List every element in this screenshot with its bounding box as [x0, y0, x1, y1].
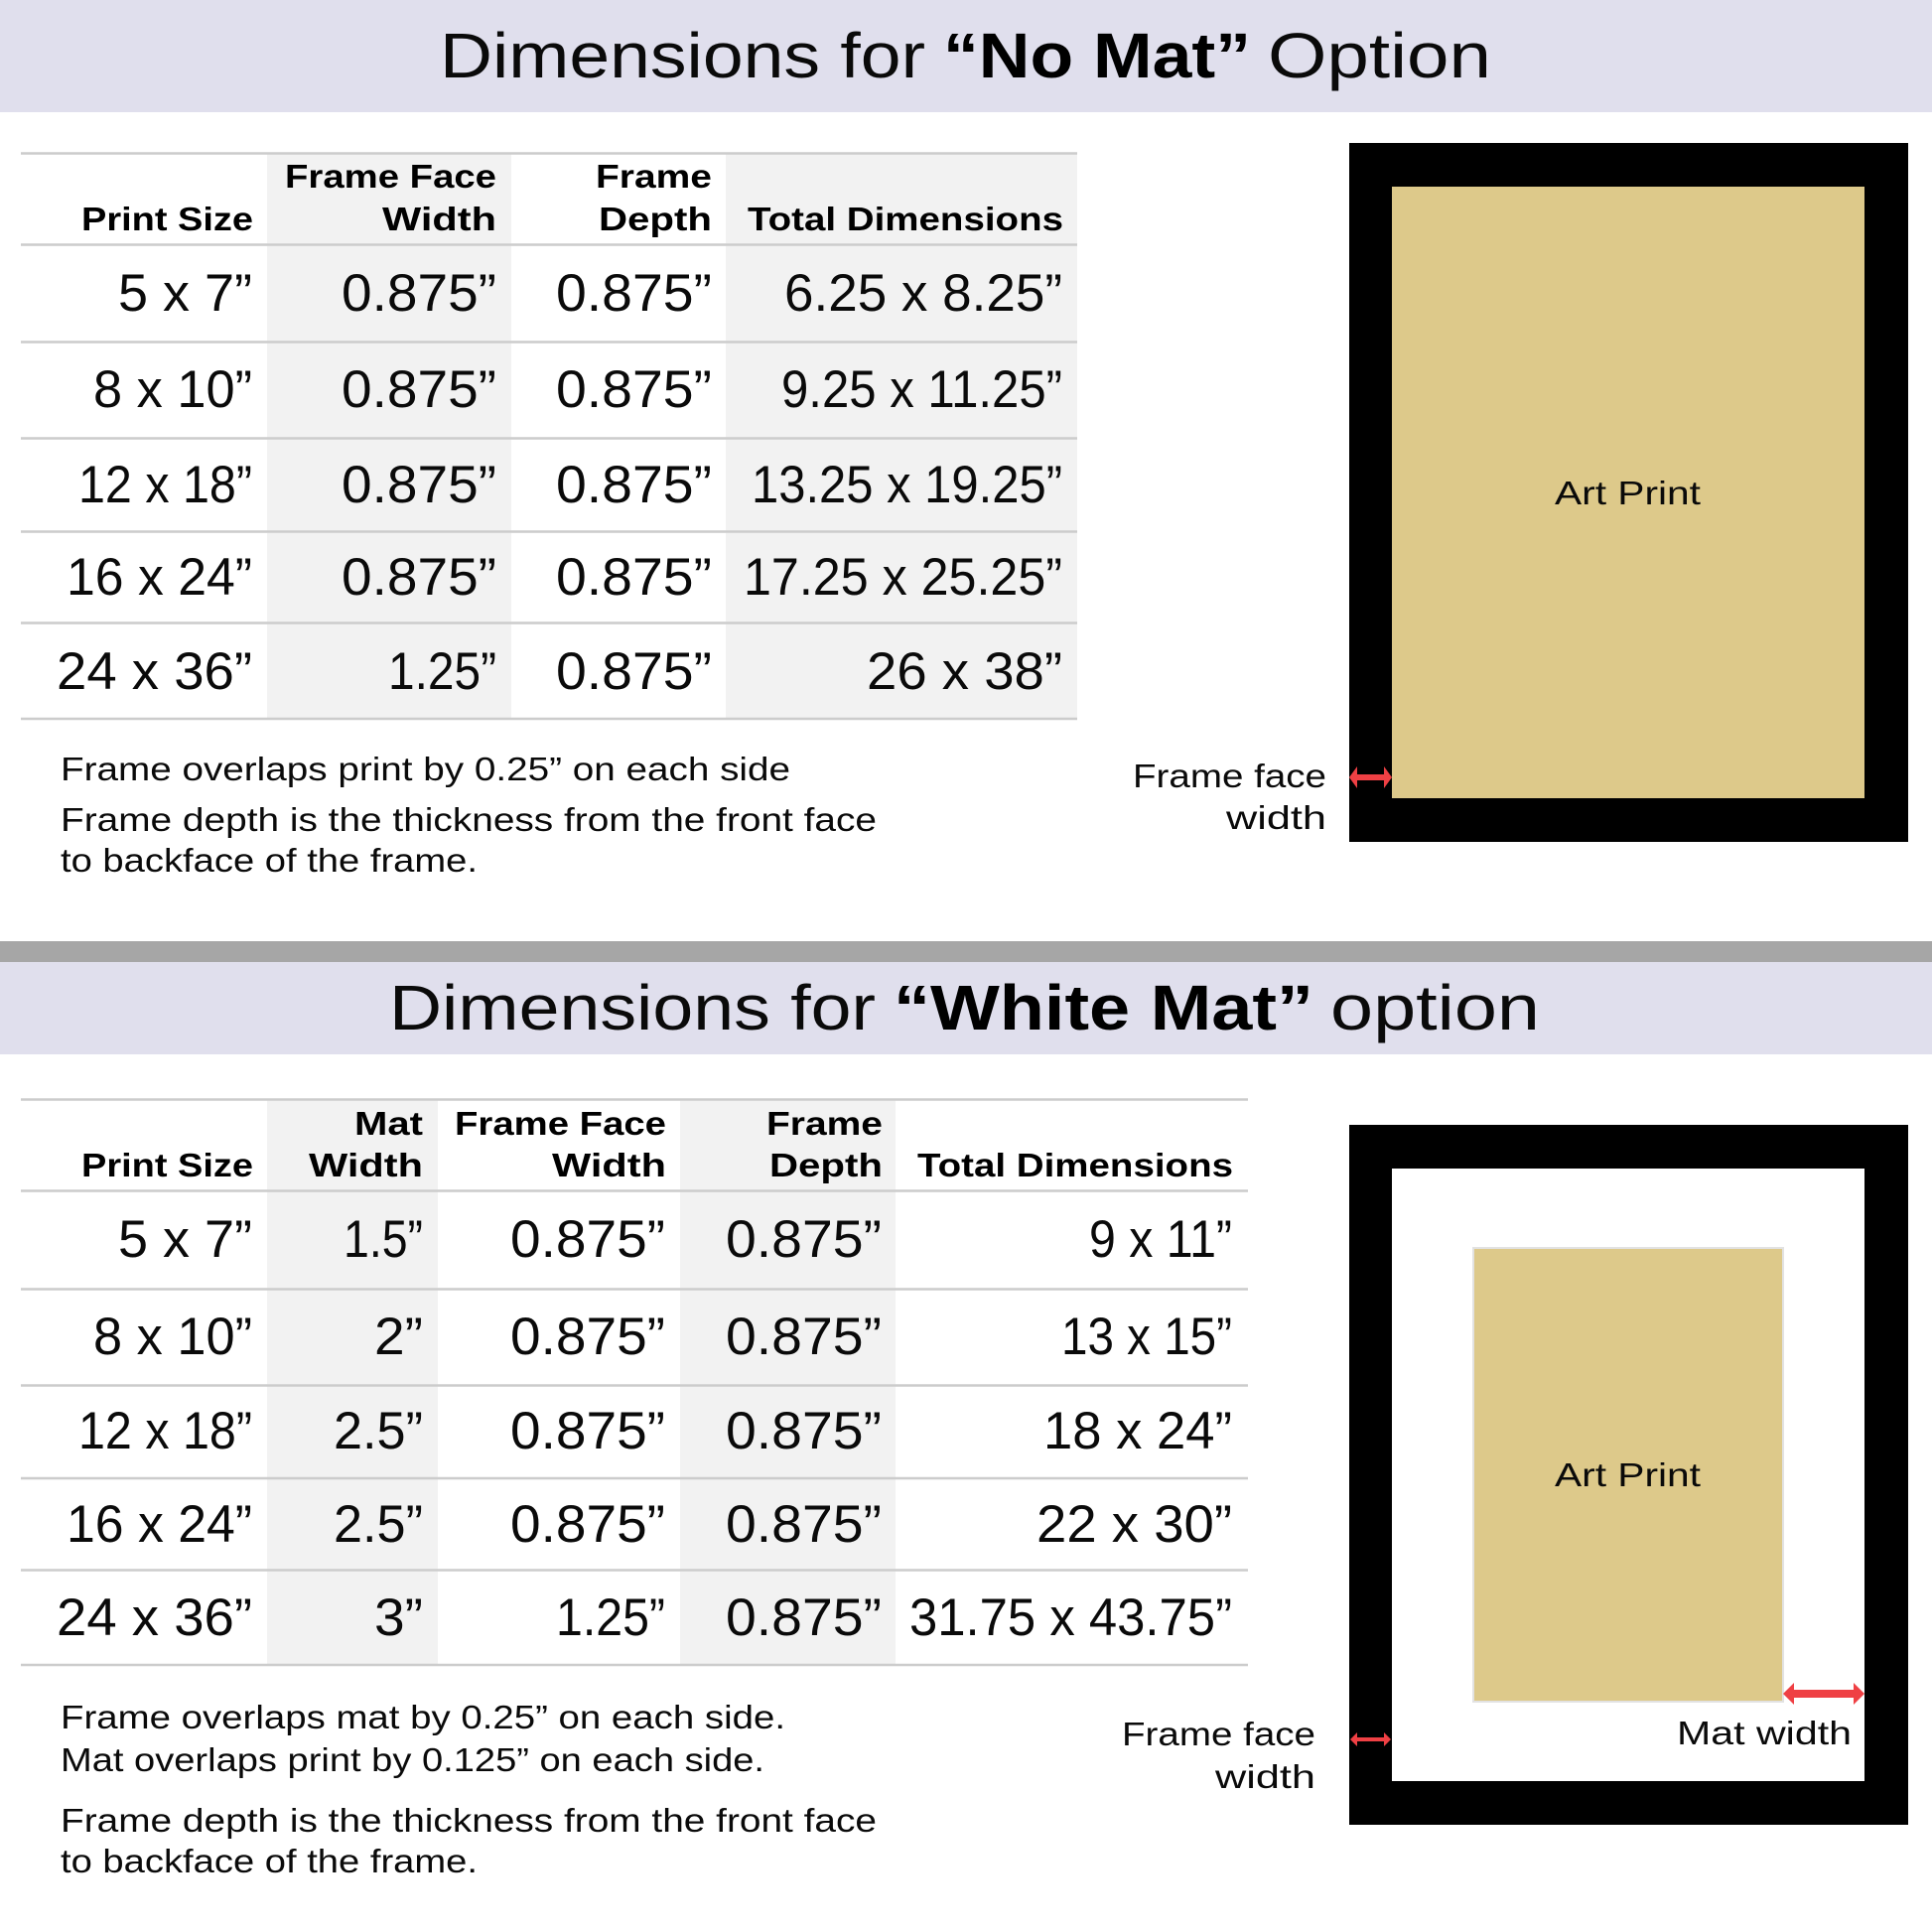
notes: White Mat: Frame depth is the thickness from the front face	[61, 1802, 877, 1839]
notes: No Mat: Frame overlaps print by 0.25” on each side	[61, 751, 790, 787]
row: 5 x 7: 0.875”	[342, 264, 496, 323]
row: 16 x 24	[67, 548, 1062, 607]
row: 12 x 18: 18 x 24”	[1043, 1402, 1232, 1460]
diagram: No Mat frame	[1349, 143, 1908, 842]
arrow: mat width	[1783, 1683, 1864, 1705]
row: 5 x 7: 9 x 11”	[1089, 1210, 1232, 1269]
row: 5 x 7: 5 x 7”	[118, 1210, 252, 1269]
row: 24 x 36: 1.25”	[556, 1588, 665, 1647]
row: 16 x 24: 0.875”	[556, 548, 712, 607]
row: 16 x 24	[67, 1495, 1232, 1554]
arrow: frame face width	[1349, 766, 1392, 788]
table header row: Mat	[354, 1105, 423, 1142]
table header row: Depth	[769, 1147, 883, 1183]
row: 24 x 36: 24 x 36”	[57, 642, 252, 701]
table header row: Frame	[766, 1105, 883, 1142]
notes: White Mat: to backface of the frame.	[61, 1843, 478, 1879]
panel: White Mat title banner	[0, 962, 1932, 1054]
row: 24 x 36: 1.25”	[388, 642, 496, 701]
notes: No Mat	[61, 751, 877, 879]
row: 16 x 24: 22 x 30”	[1036, 1495, 1232, 1554]
row: 12 x 18: 0.875”	[556, 456, 712, 514]
row: 16 x 24: 0.875”	[510, 1495, 665, 1554]
row: 5 x 7: 0.875”	[556, 264, 712, 323]
label: Art Print: Art Print	[1555, 475, 1701, 511]
row: 8 x 10: 2”	[374, 1308, 423, 1366]
title: Dimensions for White Mat option: option	[1330, 972, 1540, 1043]
row: 8 x 10: 8 x 10”	[93, 1308, 252, 1366]
label: Art Print: Art Print	[1555, 1456, 1701, 1493]
row: 8 x 10: 0.875”	[510, 1308, 665, 1366]
row: 24 x 36: 24 x 36”	[57, 1588, 252, 1647]
notes: White Mat: Frame overlaps mat by 0.25” on each side.	[61, 1699, 785, 1735]
title: Dimensions for No Mat Option: Option	[1268, 20, 1491, 91]
table header row: Width	[552, 1147, 666, 1183]
notes: White Mat	[61, 1699, 877, 1879]
label: mat width: Mat width	[1677, 1715, 1852, 1751]
label: frame face width: width	[1214, 1758, 1315, 1795]
label: frame face width	[1133, 758, 1326, 836]
row: 16 x 24: 0.875”	[726, 1495, 882, 1554]
table header row: Print Size	[81, 201, 253, 237]
table header row: Frame Face	[455, 1105, 666, 1142]
row: 12 x 18: 13.25 x 19.25”	[752, 456, 1062, 514]
row: 12 x 18	[78, 1402, 1232, 1460]
row: 24 x 36: 26 x 38”	[867, 642, 1062, 701]
table header row: Width	[309, 1147, 423, 1183]
row: 8 x 10	[93, 360, 1062, 419]
row: 8 x 10: 0.875”	[726, 1308, 882, 1366]
row: 12 x 18: 0.875”	[726, 1402, 882, 1460]
row: 16 x 24: 16 x 24”	[67, 548, 252, 607]
table header row: Width	[382, 201, 496, 237]
row: 16 x 24: 16 x 24”	[67, 1495, 252, 1554]
table header row: Total Dimensions	[748, 201, 1063, 237]
label: frame face width: Frame face	[1122, 1716, 1315, 1752]
title: Dimensions for White Mat option: Dimensions for	[389, 972, 876, 1043]
table header row: Frame	[596, 158, 712, 195]
label: frame face width	[1122, 1716, 1315, 1795]
title: Dimensions for White Mat option	[389, 972, 1540, 1043]
panel: No Mat title banner	[0, 0, 1932, 112]
label: frame face width: width	[1225, 799, 1326, 836]
row: 12 x 18: 2.5”	[334, 1402, 423, 1460]
row: 5 x 7	[118, 1210, 1232, 1269]
row: 5 x 7: 0.875”	[510, 1210, 665, 1269]
title: Dimensions for No Mat Option: Dimensions for	[440, 20, 925, 91]
notes: White Mat: Mat overlaps print by 0.125” on each side.	[61, 1741, 764, 1778]
row: 12 x 18: 12 x 18”	[78, 1402, 252, 1460]
notes: No Mat: to backface of the frame.	[61, 842, 478, 879]
row: 8 x 10: 9.25 x 11.25”	[781, 360, 1062, 419]
row: 5 x 7: 6.25 x 8.25”	[784, 264, 1062, 323]
table header row: Total Dimensions	[917, 1147, 1233, 1183]
row: 8 x 10: 13 x 15”	[1061, 1308, 1232, 1366]
label: frame face width: Frame face	[1133, 758, 1326, 794]
row: 24 x 36	[57, 1588, 1232, 1647]
row: 12 x 18	[78, 456, 1062, 514]
table header row	[81, 158, 1063, 237]
table: White Mat dimensions	[21, 1099, 1248, 1665]
table header row: Print Size	[81, 1147, 253, 1183]
row: 8 x 10: 0.875”	[342, 360, 496, 419]
row: 16 x 24: 0.875”	[342, 548, 496, 607]
row: 24 x 36: 0.875”	[556, 642, 712, 701]
notes: No Mat: Frame depth is the thickness from the front face	[61, 801, 877, 838]
row: 16 x 24: 2.5”	[334, 1495, 423, 1554]
title: Dimensions for No Mat Option	[440, 20, 1491, 91]
row: 5 x 7: 0.875”	[726, 1210, 882, 1269]
row: 12 x 18: 0.875”	[510, 1402, 665, 1460]
table header row: Frame Face	[285, 158, 496, 195]
row: 5 x 7	[118, 264, 1062, 323]
title: Dimensions for White Mat option: “White Mat”	[894, 972, 1313, 1043]
row: 5 x 7: 5 x 7”	[118, 264, 252, 323]
row: 16 x 24: 17.25 x 25.25”	[744, 548, 1062, 607]
title: Dimensions for No Mat Option: “No Mat”	[943, 20, 1251, 91]
table header row	[81, 1105, 1233, 1183]
row: 24 x 36: 3”	[374, 1588, 423, 1647]
table header row: Depth	[599, 201, 712, 237]
row: 8 x 10: 0.875”	[556, 360, 712, 419]
row: 24 x 36	[57, 642, 1062, 701]
arrow: frame face width	[1350, 1732, 1391, 1746]
row: 24 x 36: 31.75 x 43.75”	[909, 1588, 1232, 1647]
row: 5 x 7: 1.5”	[344, 1210, 423, 1269]
row: 12 x 18: 12 x 18”	[78, 456, 252, 514]
table: No Mat dimensions	[21, 153, 1077, 719]
row: 8 x 10: 8 x 10”	[93, 360, 252, 419]
diagram: White Mat frame	[1349, 1125, 1908, 1825]
row: 12 x 18: 0.875”	[342, 456, 496, 514]
section divider band	[0, 941, 1932, 962]
row: 24 x 36: 0.875”	[726, 1588, 882, 1647]
row: 8 x 10	[93, 1308, 1232, 1366]
